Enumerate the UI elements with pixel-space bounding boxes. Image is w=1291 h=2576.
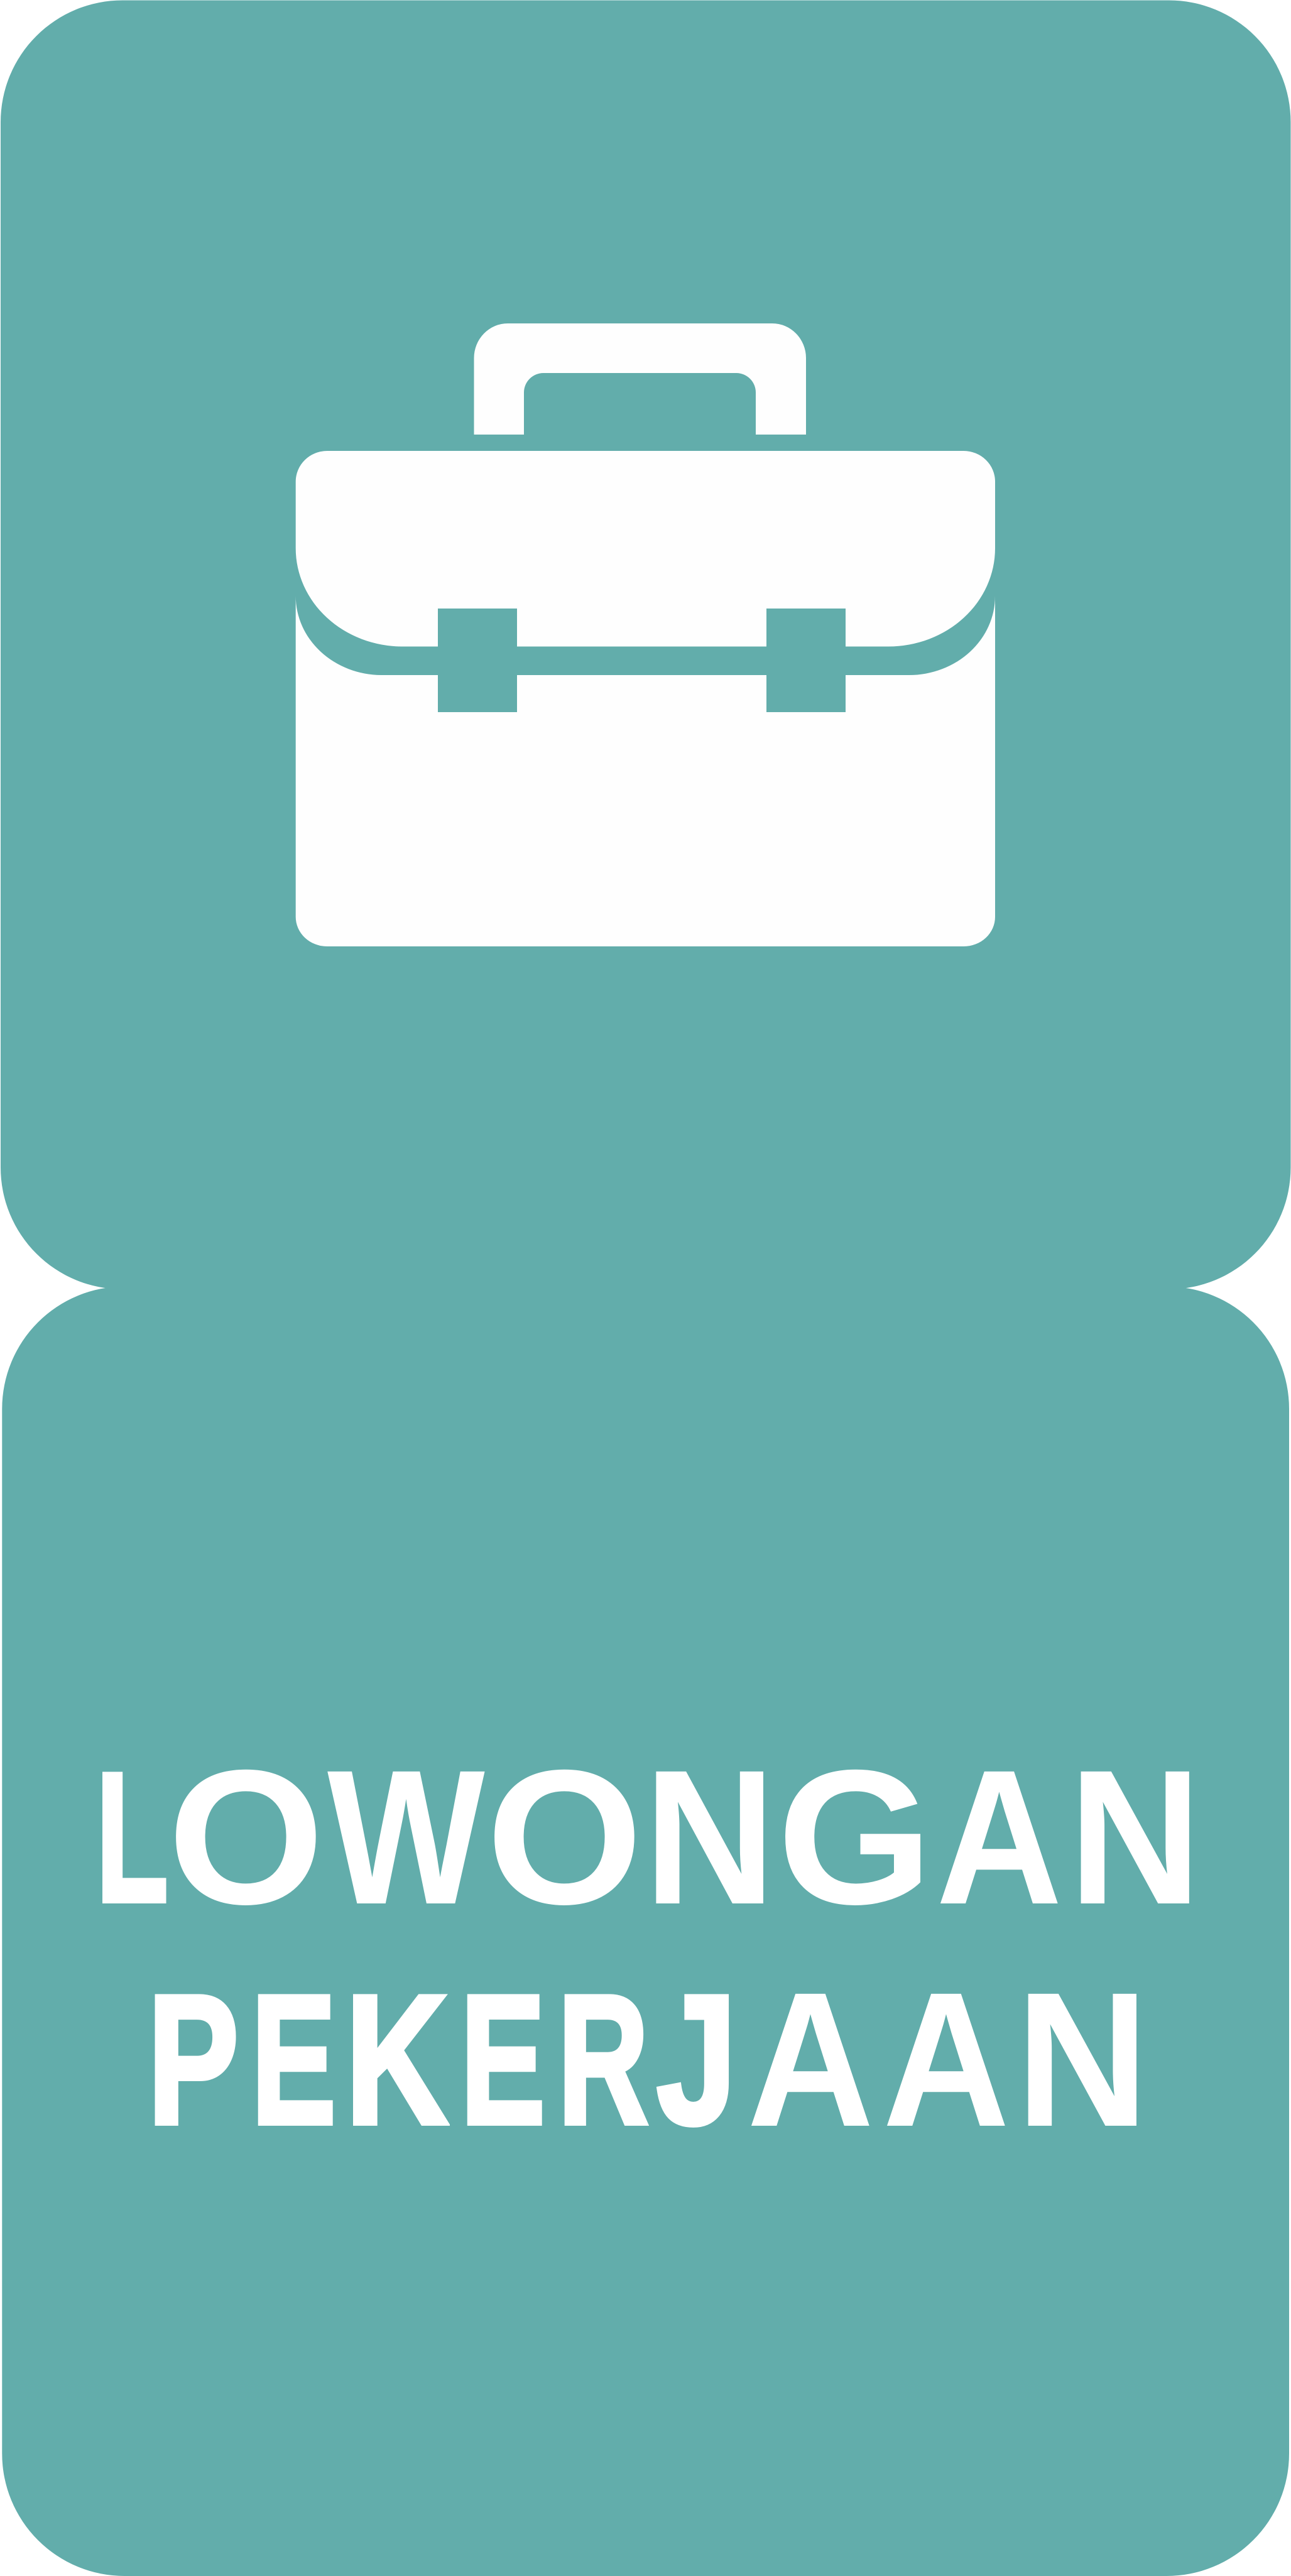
title line 2: J [656, 1957, 737, 2163]
title: Lowongan Pekerjaan [96, 1731, 1202, 2167]
briefcase lower body [296, 596, 995, 946]
panel: lower teal rounded tile [2, 1286, 1289, 2576]
title line 1 [96, 1731, 1202, 1945]
title line 1: O [168, 1731, 324, 1945]
briefcase upper flap [296, 451, 995, 647]
title line 2: E [251, 1957, 336, 2163]
title line 1: L [96, 1735, 168, 1940]
title line 1: W [327, 1731, 485, 1945]
title line 2: R [558, 1957, 648, 2163]
briefcase handle [474, 323, 806, 435]
title line 1: A [936, 1731, 1062, 1945]
title line 2: K [346, 1957, 448, 2163]
title line 1: G [777, 1731, 933, 1945]
title line 1: O [486, 1731, 643, 1945]
title line 2: P [148, 1957, 239, 2163]
panel: upper teal rounded tile [1, 0, 1290, 1289]
title line 2: A [747, 1953, 874, 2167]
title line 2: E [460, 1957, 545, 2163]
title line 2 [148, 1953, 1149, 2167]
title line 1: N [644, 1731, 776, 1945]
icon: briefcase [296, 323, 995, 946]
title line 2: N [1016, 1953, 1149, 2167]
title line 2: A [883, 1953, 1010, 2167]
title line 1: N [1069, 1731, 1202, 1945]
